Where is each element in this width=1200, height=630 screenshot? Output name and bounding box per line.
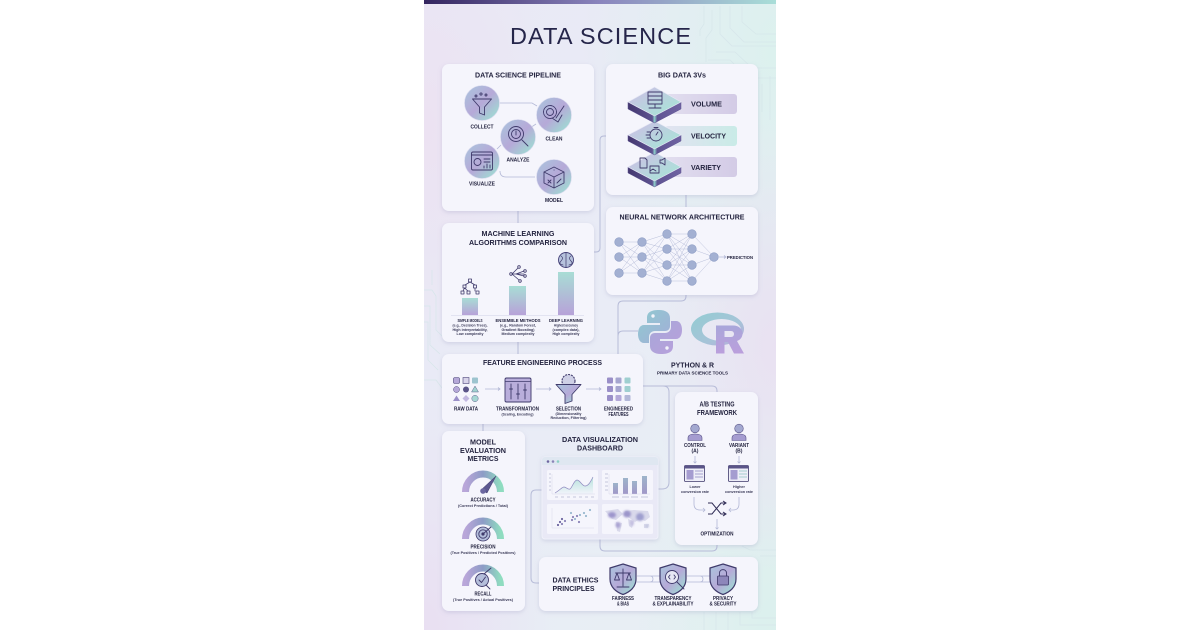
top accent bar (424, 0, 776, 4)
icon: decision tree (461, 279, 479, 294)
icon: variant user (732, 424, 746, 440)
connector lines (483, 136, 717, 583)
label: lower conversion: Lower (690, 485, 701, 489)
icon: python logo (638, 310, 682, 354)
tier: variety (628, 152, 737, 187)
label: transformation: TRANSFORMATION (496, 406, 539, 412)
network nodes (615, 230, 718, 285)
chart: bars (602, 470, 653, 500)
arrows to pages (694, 456, 740, 463)
pipeline arrows (497, 103, 537, 177)
label: control (684, 443, 706, 454)
dashboard window (542, 457, 658, 539)
icon: variant page (728, 466, 748, 482)
label: ensemble methods: Medium complexity (502, 332, 535, 336)
gauge: accuracy (466, 474, 500, 494)
panel: feature engineering process (442, 354, 643, 424)
label: precision: PRECISION (470, 544, 496, 550)
label: ensemble methods: (e.g., Random Forest, (500, 324, 536, 328)
label: privacy: PRIVACY (713, 596, 734, 602)
label: variant: (B) (736, 448, 743, 454)
label: selection: Reduction, Filtering) (550, 416, 587, 420)
icon: selection funnel (556, 374, 581, 404)
label: simple models (452, 318, 488, 336)
heading: model evaluation (460, 438, 506, 463)
icon: raw data shapes (453, 378, 478, 402)
icon: clean gear and brush (536, 98, 572, 132)
chart: scatter plot (547, 504, 598, 534)
label: recall (453, 592, 514, 602)
icon: brain (558, 252, 574, 268)
label: simple models: (e.g., Decision Trees), (452, 324, 488, 328)
label: selection: SELECTION (556, 406, 581, 412)
label: higher conversion: conversion rate (725, 490, 753, 494)
icon: transparency shield (660, 564, 686, 594)
heading: machine learning: MACHINE LEARNING (482, 229, 555, 238)
heading: pipeline: DATA SCIENCE PIPELINE (475, 70, 561, 80)
icon: r logo (691, 312, 744, 354)
arrow: transformation to selection (536, 388, 551, 390)
gauge: recall (466, 568, 500, 589)
label: simple models: SIMPLE MODELS (458, 318, 483, 323)
heading: big data: BIG DATA 3Vs (658, 70, 706, 80)
label: deep learning (549, 318, 583, 336)
label: visualize: VISUALIZE (469, 182, 496, 188)
label: recall: RECALL (474, 592, 492, 598)
label: ensemble methods: ENSEMBLE METHODS (496, 318, 541, 323)
chart: world map (602, 504, 653, 534)
network connections (619, 234, 714, 281)
label: selection: (Dimensionality (556, 412, 582, 416)
arrows between principles (637, 576, 710, 582)
label: lower conversion: conversion rate (681, 490, 709, 494)
heading: model evaluation: EVALUATION (460, 446, 506, 455)
icon: shuffle (708, 501, 726, 516)
label: transparency: & EXPLAINABILITY (652, 602, 694, 608)
label: fairness: FAIRNESS (612, 596, 635, 602)
heading: machine learning (469, 229, 567, 247)
panel: neural network architecture (606, 207, 758, 295)
label: fairness: & BIAS (617, 602, 629, 608)
label: precision: (True Positives / Predicted Positives) (450, 551, 516, 555)
title: DATA SCIENCE (510, 23, 691, 49)
label: deep learning: High complexity (552, 332, 580, 336)
label: deep learning: Highest accuracy (554, 324, 579, 328)
arrow: raw to transformation (485, 388, 500, 390)
bar: ensemble methods (509, 286, 526, 315)
label: variant (729, 443, 749, 454)
bar: simple models (462, 298, 478, 315)
icon: ensemble network (510, 266, 526, 282)
label: collect: COLLECT (470, 125, 494, 131)
background (424, 0, 776, 630)
panel: big data 3Vs (606, 64, 758, 195)
icon: transformation sliders (505, 378, 531, 402)
panel: python and r (638, 310, 744, 375)
subtitle: tools: PRIMARY DATA SCIENCE TOOLS (657, 370, 728, 375)
arrow to optimization (716, 519, 718, 529)
label: accuracy: (Correct Predictions / Total) (458, 504, 509, 508)
tier: variety: VARIETY (691, 163, 721, 172)
panel: machine learning algorithms comparison (442, 223, 594, 342)
panel: data ethics principles (539, 557, 758, 611)
label: fairness (612, 596, 635, 608)
icon: fairness shield (610, 564, 636, 594)
label: analyze: ANALYZE (506, 158, 530, 164)
label: simple models: High interpretability, (452, 328, 488, 332)
heading: data ethics: DATA ETHICS (552, 576, 598, 584)
heading: dashboard: DASHBOARD (577, 444, 623, 452)
heading: a/b testing (697, 400, 737, 417)
panel: a/b testing framework (675, 392, 758, 545)
label: simple models: Low complexity (456, 332, 484, 336)
label: precision (450, 544, 516, 555)
panel: data science pipeline (442, 64, 594, 211)
bar: deep learning (558, 272, 574, 315)
tier: velocity: VELOCITY (691, 132, 726, 140)
window title bar (542, 457, 658, 465)
label: privacy: & SECURITY (710, 602, 737, 608)
label: variant: VARIANT (729, 443, 749, 449)
label: transformation: (Scaling, Encoding) (502, 412, 534, 416)
icon: control user (688, 424, 702, 440)
panel: data visualization dashboard (542, 435, 658, 539)
label: accuracy: ACCURACY (470, 498, 496, 504)
label: prediction: PREDICTION (727, 255, 753, 260)
label: transparency: TRANSPARENCY (654, 596, 692, 602)
icon: visualize dashboard (464, 144, 500, 178)
label: clean: CLEAN (546, 137, 563, 143)
arrows to shuffle (694, 497, 739, 512)
arrow: selection to features (586, 388, 601, 390)
heading: feature engineering: FEATURE ENGINEERING PROCESS (483, 358, 602, 367)
heading: model evaluation: METRICS (468, 454, 498, 463)
icon: analyze magnifier (500, 120, 536, 154)
label: model: MODEL (545, 198, 563, 204)
label: engineered features (604, 406, 633, 418)
label: deep learning: (complex data), (552, 328, 580, 332)
icon: control page (684, 466, 704, 482)
label: control: CONTROL (684, 443, 706, 449)
label: higher conversion (725, 485, 753, 494)
heading: data ethics: PRINCIPLES (552, 584, 594, 593)
label: raw data: RAW DATA (454, 406, 478, 412)
label: transformation (496, 406, 539, 416)
heading: neural network: NEURAL NETWORK ARCHITECTURE (620, 213, 744, 222)
label: lower conversion (681, 485, 709, 494)
tier: volume (628, 87, 737, 123)
heading: machine learning: ALGORITHMS COMPARISON (469, 238, 567, 247)
chart: line area (547, 470, 598, 500)
label: deep learning: DEEP LEARNING (549, 318, 583, 323)
heading: dashboard (562, 435, 638, 452)
label: transparency (652, 596, 694, 608)
heading: a/b testing: A/B TESTING (700, 400, 735, 408)
heading: dashboard: DATA VISUALIZATION (562, 435, 638, 444)
label: privacy (710, 596, 737, 608)
arrow to prediction (719, 256, 726, 258)
chart baseline (451, 314, 584, 316)
icon: model cube (536, 160, 572, 194)
heading: a/b testing: FRAMEWORK (697, 408, 737, 417)
gauge: precision (466, 521, 500, 541)
heading: model evaluation: MODEL (470, 438, 496, 446)
label: ensemble methods (496, 318, 541, 336)
label: recall: (True Positives / Actual Positives) (453, 598, 514, 602)
heading: data ethics (552, 576, 598, 593)
heading: python and r: PYTHON & R (671, 360, 714, 370)
tier: velocity (628, 121, 737, 155)
label: engineered features: FEATURES (608, 412, 629, 418)
label: ensemble methods: Gradient Boosting) (502, 328, 535, 332)
icon: engineered feature grid (607, 378, 630, 401)
label: control: (A) (692, 448, 699, 454)
label: optimization: OPTIMIZATION (700, 532, 734, 538)
tier: volume: VOLUME (691, 100, 722, 108)
panel: model evaluation metrics (442, 431, 525, 611)
label: accuracy (458, 498, 509, 508)
label: engineered features: ENGINEERED (604, 406, 633, 412)
label: higher conversion: Higher (733, 485, 746, 489)
icon: collect funnel (464, 86, 500, 120)
icon: privacy shield (710, 564, 736, 594)
label: selection (550, 406, 587, 420)
